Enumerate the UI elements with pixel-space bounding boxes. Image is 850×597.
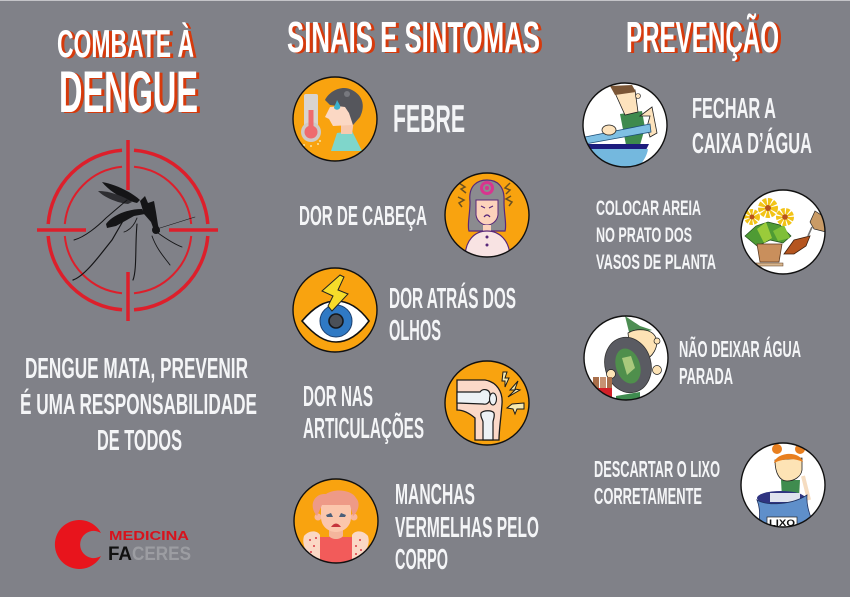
title: combate à: COMBATE À xyxy=(57,22,194,66)
label: fechar a caixa d'água: FECHAR A xyxy=(692,93,776,125)
icon: dor atrás dos olhos xyxy=(293,268,377,352)
icon: fechar a caixa d'água xyxy=(583,83,667,170)
label: dor de cabeça: DOR DE CABEÇA xyxy=(299,200,427,231)
text: dengue mata: DENGUE MATA, PREVENIR xyxy=(25,353,248,385)
label: dor atrás dos olhos: DOR ATRÁS DOS xyxy=(389,281,516,315)
label: colocar areia xyxy=(596,197,716,274)
panel: sinais e sintomas xyxy=(287,13,540,576)
label: dor nas articulações xyxy=(303,381,424,445)
label: colocar areia: VASOS DE PLANTA xyxy=(596,251,716,274)
icon: não deixar água parada xyxy=(584,316,668,402)
text: dengue mata xyxy=(20,353,257,457)
logo: medicina faceres: FA xyxy=(108,544,132,565)
icon: descartar o lixo xyxy=(741,443,825,530)
label: não deixar água parada xyxy=(679,335,801,389)
label: não deixar água parada: PARADA xyxy=(679,363,733,389)
logo: medicina faceres: CERES xyxy=(132,544,191,565)
label: dor nas articulações: DOR NAS xyxy=(303,381,373,413)
label: descartar o lixo: DESCARTAR O LIXO xyxy=(594,456,720,482)
label: manchas vermelhas pelo corpo: VERMELHAS PELO xyxy=(395,512,539,544)
icon: manchas vermelhas xyxy=(294,479,378,563)
heading: sinais e sintomas: SINAIS E SINTOMAS xyxy=(287,13,540,62)
logo: medicina faceres: MEDICINA xyxy=(109,528,190,543)
logo: medicina faceres xyxy=(55,520,191,569)
label: dor nas articulações: ARTICULAÇÕES xyxy=(303,411,424,445)
title: dengue: DENGUE xyxy=(59,60,198,125)
icon: dor de cabeça xyxy=(445,173,529,258)
panel: combate à dengue xyxy=(20,22,257,569)
text: dengue mata: DE TODOS xyxy=(97,425,182,457)
label: fechar a caixa d'água xyxy=(692,93,812,160)
label: colocar areia: COLOCAR AREIA xyxy=(596,197,701,220)
label: colocar areia: NO PRATO DOS xyxy=(596,224,692,247)
icon: mosquito in red target xyxy=(37,140,218,321)
panel: prevenção xyxy=(583,12,826,530)
text: dengue mata: É UMA RESPONSABILIDADE xyxy=(20,387,257,421)
icon: febre xyxy=(293,77,377,161)
label: manchas vermelhas pelo corpo: CORPO xyxy=(395,544,448,576)
label: descartar o lixo: CORRETAMENTE xyxy=(594,483,702,509)
label: manchas vermelhas pelo corpo: MANCHAS xyxy=(395,479,475,511)
label: dor atrás dos olhos xyxy=(389,281,516,347)
icon: colocar areia no prato xyxy=(741,190,826,274)
label: dor atrás dos olhos: OLHOS xyxy=(389,315,441,347)
icon: descartar o lixo: LIXO xyxy=(769,518,795,528)
label: descartar o lixo xyxy=(594,456,720,509)
label: manchas vermelhas pelo corpo xyxy=(395,479,539,576)
label: febre: FEBRE xyxy=(393,98,465,141)
icon: dor nas articulações xyxy=(445,361,529,445)
